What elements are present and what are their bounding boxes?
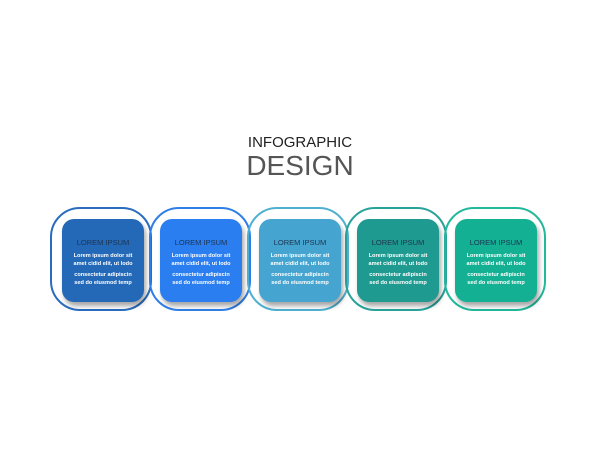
card 3: amet cidid elit, ut lodo <box>270 261 330 267</box>
card 3: Lorem ipsum dolor sit <box>271 253 329 259</box>
card 2: LOREM IPSUM <box>175 238 227 247</box>
card 3: LOREM IPSUM <box>274 238 326 247</box>
card 4: sed do eiusmod temp <box>369 280 427 286</box>
ring 1 <box>50 207 152 311</box>
card 5: sed do eiusmod temp <box>467 280 525 286</box>
card 3 <box>259 219 341 302</box>
card 1: amet cidid elit, ut lodo <box>73 261 133 267</box>
card 4 <box>357 219 439 302</box>
card 2: sed do eiusmod temp <box>172 280 230 286</box>
card 5 <box>455 219 537 302</box>
card 4: amet cidid elit, ut lodo <box>368 261 428 267</box>
card 3: sed do eiusmod temp <box>271 280 329 286</box>
card 1: consectetur adipiscin <box>74 272 132 278</box>
ring 5 <box>444 207 546 311</box>
card 5: amet cidid elit, ut lodo <box>466 261 526 267</box>
card 2: Lorem ipsum dolor sit <box>172 253 230 259</box>
card 4: Lorem ipsum dolor sit <box>369 253 427 259</box>
card 4: consectetur adipiscin <box>369 272 427 278</box>
card 1: LOREM IPSUM <box>77 238 129 247</box>
title: INFOGRAPHIC <box>248 134 352 151</box>
card 1: sed do eiusmod temp <box>74 280 132 286</box>
card 4: LOREM IPSUM <box>372 238 424 247</box>
card 5: LOREM IPSUM <box>470 238 522 247</box>
card 2 <box>160 219 242 302</box>
card 5: Lorem ipsum dolor sit <box>467 253 525 259</box>
ring 4 <box>345 207 447 311</box>
card 1 <box>62 219 144 302</box>
card 2: amet cidid elit, ut lodo <box>171 261 231 267</box>
card 2: consectetur adipiscin <box>172 272 230 278</box>
ring 3 <box>247 207 349 311</box>
ring 2 <box>149 207 251 311</box>
subtitle: DESIGN <box>246 150 354 181</box>
card 5: consectetur adipiscin <box>467 272 525 278</box>
card 1: Lorem ipsum dolor sit <box>74 253 132 259</box>
card 3: consectetur adipiscin <box>271 272 329 278</box>
